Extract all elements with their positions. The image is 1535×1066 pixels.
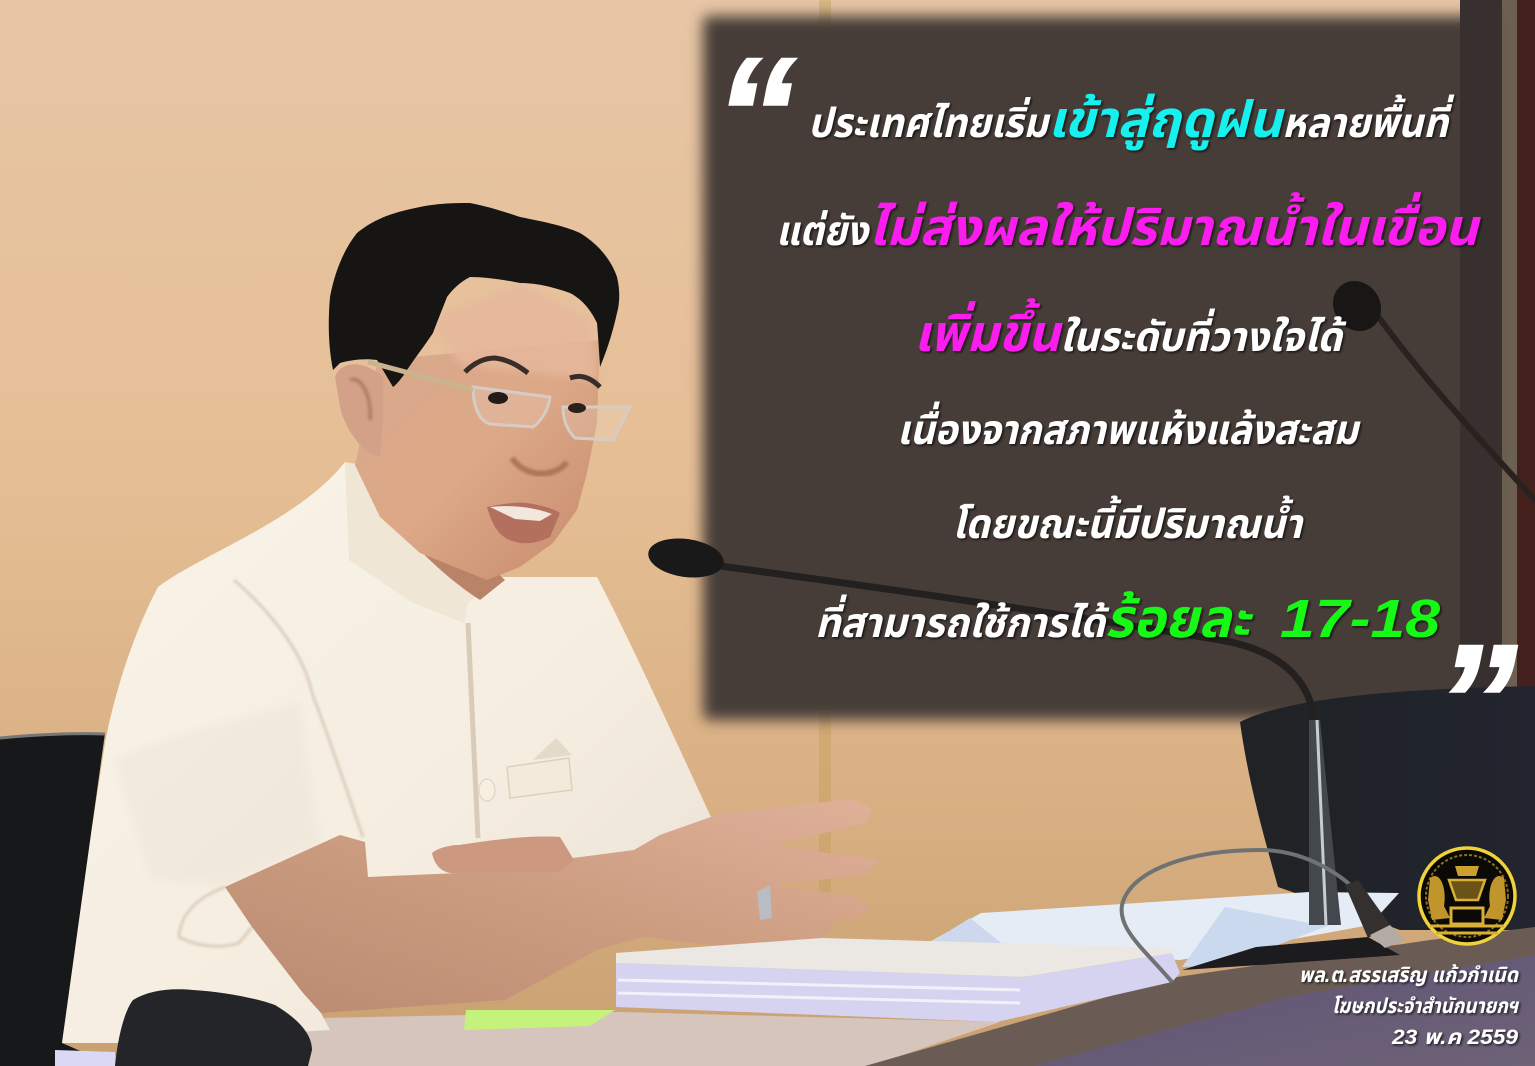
microphones and cables (720, 312, 1535, 720)
line 3: ในระดับที่วางใจได้ (1060, 308, 1347, 360)
forearm (225, 799, 880, 1013)
line 6 (815, 589, 1440, 649)
quote text (776, 91, 1481, 649)
glasses temple (368, 362, 473, 390)
hair (329, 203, 619, 387)
line 2: แต่ยัง (776, 208, 870, 254)
line 1 (808, 91, 1455, 151)
line 2: ไม่ส่งผลให้ปริมาณน้ำในเขื่อน (868, 192, 1481, 256)
left chair (0, 733, 115, 1066)
shirt folds (179, 580, 363, 946)
ring (757, 885, 772, 920)
paper scrap (55, 1050, 115, 1066)
line 1: หลายพื้นที่ (1282, 94, 1455, 146)
caption: spokesperson and date (1299, 964, 1520, 1049)
icon: microphone heads (646, 272, 1405, 948)
button (479, 779, 495, 801)
shirt body (62, 462, 711, 1043)
panel strip: dark right edge (1460, 0, 1502, 712)
closing quotation mark: ” (1435, 610, 1518, 794)
caption: spokesperson and date: พล.ต.สรรเสริญ แก้วกำเนิด (1299, 964, 1520, 987)
line 6: 17-18 (1280, 589, 1440, 649)
microphone stand (1309, 720, 1341, 925)
line 1: เข้าสู่ฤดูฝน (1048, 91, 1285, 151)
nose (512, 458, 567, 474)
glasses (473, 387, 630, 440)
microphone base (1182, 937, 1400, 970)
eyebrows (465, 358, 528, 373)
line 3: เพิ่มขึ้น (914, 298, 1063, 362)
line 3 (914, 298, 1347, 362)
eyes (488, 392, 508, 404)
person: speaker in cream shirt (62, 203, 880, 1043)
line 4: เนื่องจากสภาพแห้งแล้งสะสม (897, 401, 1361, 453)
pocket (507, 758, 572, 798)
opening quotation mark: “ (714, 23, 797, 207)
face (355, 340, 600, 580)
neck (358, 450, 505, 600)
mouth (487, 503, 560, 543)
line 1: ประเทศไทยเริ่ม (808, 96, 1051, 146)
caption: spokesperson and date: 23 พ.ค 2559 (1391, 1026, 1518, 1049)
black microphone cover (115, 989, 312, 1066)
panel: dark translucent quote box (703, 16, 1493, 720)
caption: spokesperson and date: โฆษกประจำสำนักนายกฯ (1332, 995, 1519, 1018)
desk: front band and mauve surface (865, 927, 1535, 1066)
line 6: ที่สามารถใช้การได้ (815, 594, 1110, 646)
desk: light table top (60, 1012, 1000, 1066)
line 6: ร้อยละ (1105, 589, 1254, 649)
far hand (432, 837, 574, 873)
icon: government seal (1419, 848, 1515, 944)
paper stack (616, 938, 1180, 1022)
right chair (1240, 686, 1535, 930)
ear (335, 364, 383, 457)
microphone cable (1122, 850, 1350, 982)
line 5: โดยขณะนี้มีปริมาณน้ำ (952, 495, 1304, 547)
curled papers (928, 892, 1399, 967)
left desk items: highlighter (464, 1010, 615, 1030)
